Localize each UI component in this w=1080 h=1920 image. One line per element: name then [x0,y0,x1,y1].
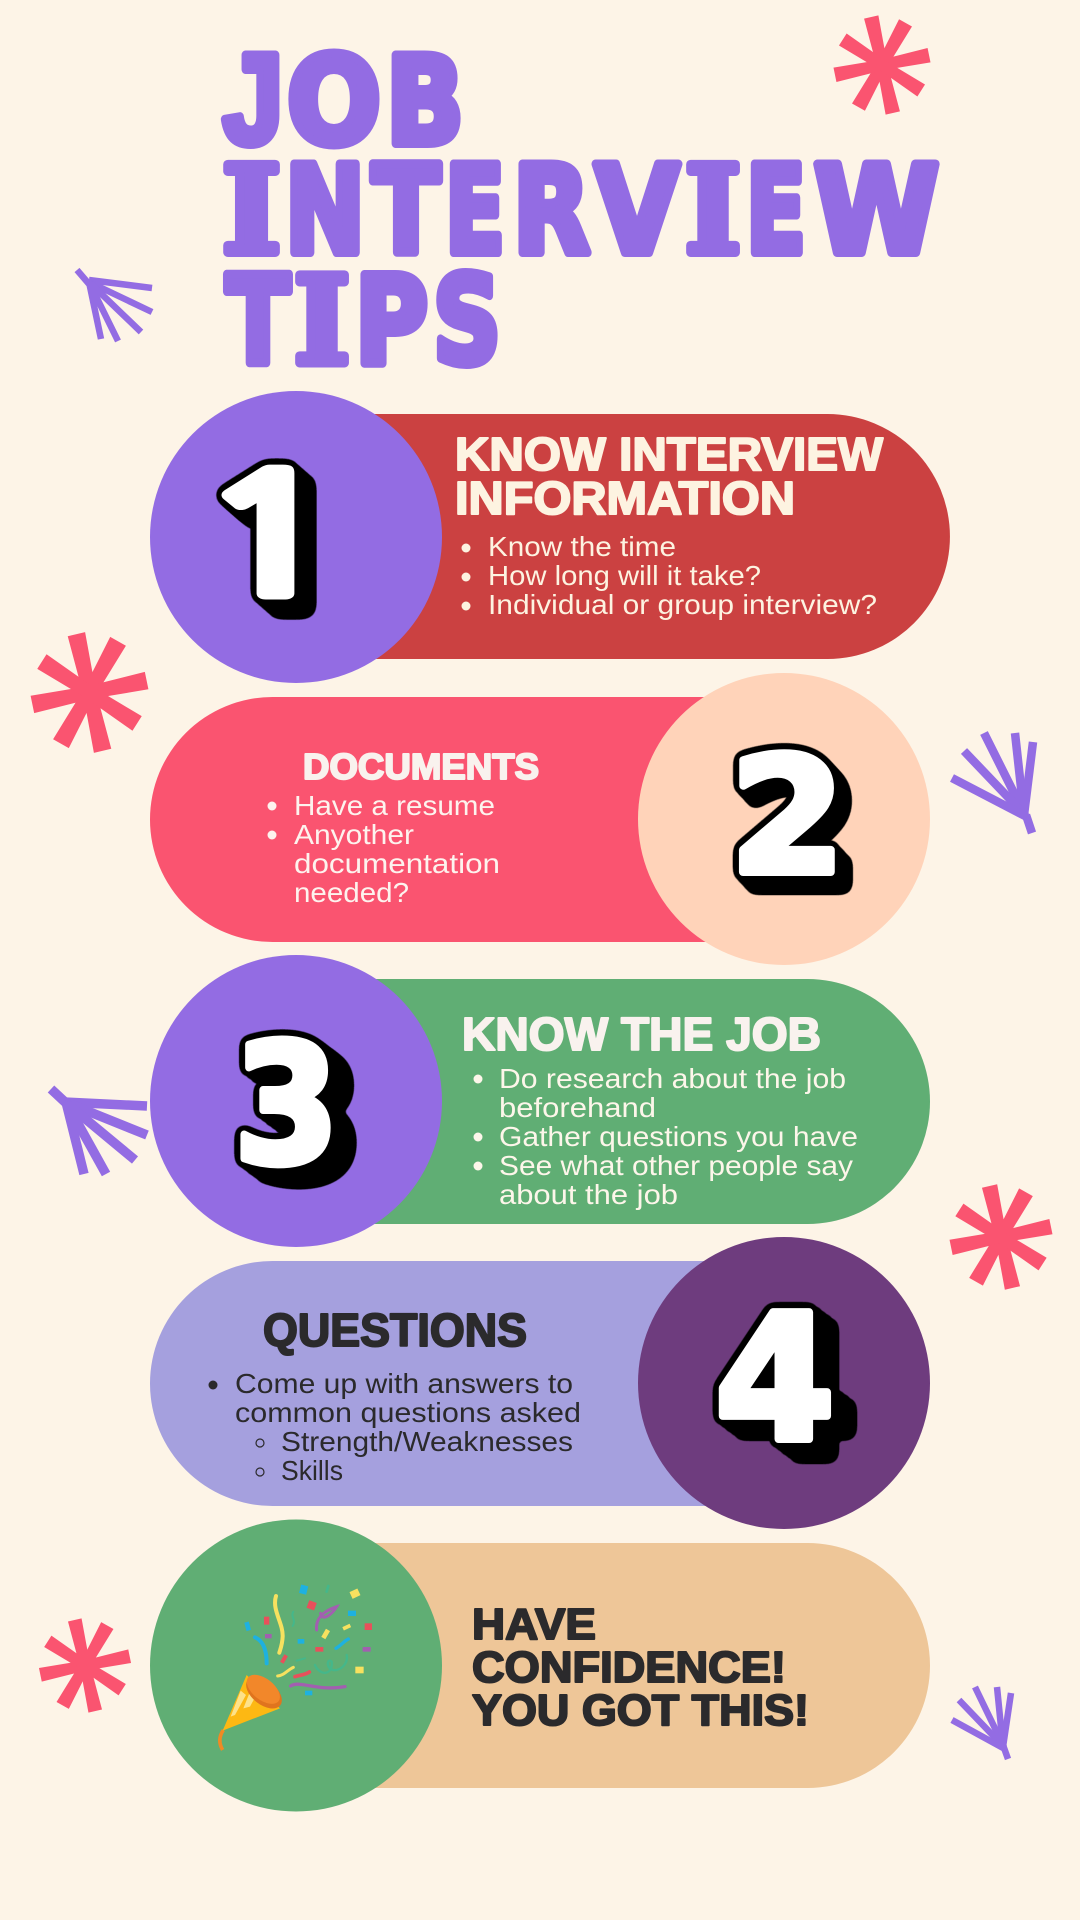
panel 1 heading [455,428,884,524]
panel 1 list [462,531,877,620]
panel 4: questions [150,1237,930,1529]
panel 4 list: Skills [281,1455,343,1486]
title: I [685,138,741,282]
decoration: purple fan right of panel 2 [952,733,1033,833]
decoration: red asterisk left of panel 5 [39,1618,131,1713]
number 3: 3 [234,1009,339,1201]
title: E [445,140,505,282]
panel 5 message: YOU GOT THIS! [472,1686,809,1735]
panel 5: have confidence [150,1520,930,1812]
title: W [814,140,939,282]
panel 4 pill [150,1261,784,1506]
panel 2 list: Have a resume [294,790,495,821]
decoration: purple fan right of panel 5 [952,1687,1011,1759]
decoration: purple fan top left [77,270,152,341]
panel 3 list: See what other people say [499,1150,853,1181]
panel 1 heading: KNOW INTERVIEW [455,428,884,480]
title: T [372,140,440,282]
title: I [294,249,350,392]
panel 4 list: Come up with answers to [235,1368,573,1399]
panel 3 list: Do research about the job [499,1063,846,1094]
number 2: 2 [730,723,845,910]
panel 5 pill [296,1543,930,1788]
panel 3 circle [150,955,442,1247]
icon: party popper [220,1585,372,1750]
panel 2 list: needed? [294,877,409,908]
panel 4 list [208,1368,581,1486]
panel 1 circle [150,391,442,683]
title: J [223,28,283,172]
panel 3 list: beforehand [499,1092,656,1123]
decoration: red asterisk right of panel 4 [950,1184,1052,1290]
panel 2 list: Anyother [294,819,414,850]
title: E [746,140,806,282]
panel 1 list: Know the time [488,531,676,562]
panel 2 circle [638,673,930,965]
decoration: purple fan left of panel 3 [51,1089,147,1174]
panel 3 pill [296,979,930,1224]
title: I [222,138,281,282]
panel 1 pill [296,414,950,659]
panel 3 list [474,1063,858,1210]
title: N [285,140,365,282]
decoration: red asterisk left of panel 2 [31,632,148,753]
title [222,28,939,392]
panel 2 pill [150,697,784,942]
panel 1 heading: INFORMATION [455,472,795,524]
panel 1 list: Individual or group interview? [488,589,877,620]
panel 5 message [472,1600,809,1735]
panel 3 list: about the job [499,1179,678,1210]
panel 3 list: Gather questions you have [499,1121,858,1152]
decoration: red asterisk top right [833,15,931,115]
panel 2 list: documentation [294,848,500,879]
title: V [595,140,679,282]
panel 4 list: Strength/Weaknesses [281,1426,573,1457]
panel 1 list: How long will it take? [488,560,761,591]
panel 5 message: HAVE [472,1600,596,1649]
title: R [513,140,590,282]
panel 4 list: common questions asked [235,1397,581,1428]
number 4: 4 [715,1278,835,1481]
panel 3: know the job [150,955,930,1247]
panel 4 heading: QUESTIONS [263,1304,527,1356]
number 1: 1 [196,455,344,620]
panel 2: documents [150,673,930,965]
title: S [433,251,501,392]
panel 3 heading: KNOW THE JOB [462,1008,821,1060]
panel 4 circle [638,1237,930,1529]
panel 5 message: CONFIDENCE! [472,1643,786,1692]
title: T [226,251,290,392]
title: P [355,251,428,392]
panel 1: know interview information [150,391,950,683]
panel 2 heading: DOCUMENTS [303,746,539,787]
title: B [386,32,464,172]
panel 5 circle [150,1520,442,1812]
title: O [287,32,381,172]
panel 2 list [268,790,500,908]
